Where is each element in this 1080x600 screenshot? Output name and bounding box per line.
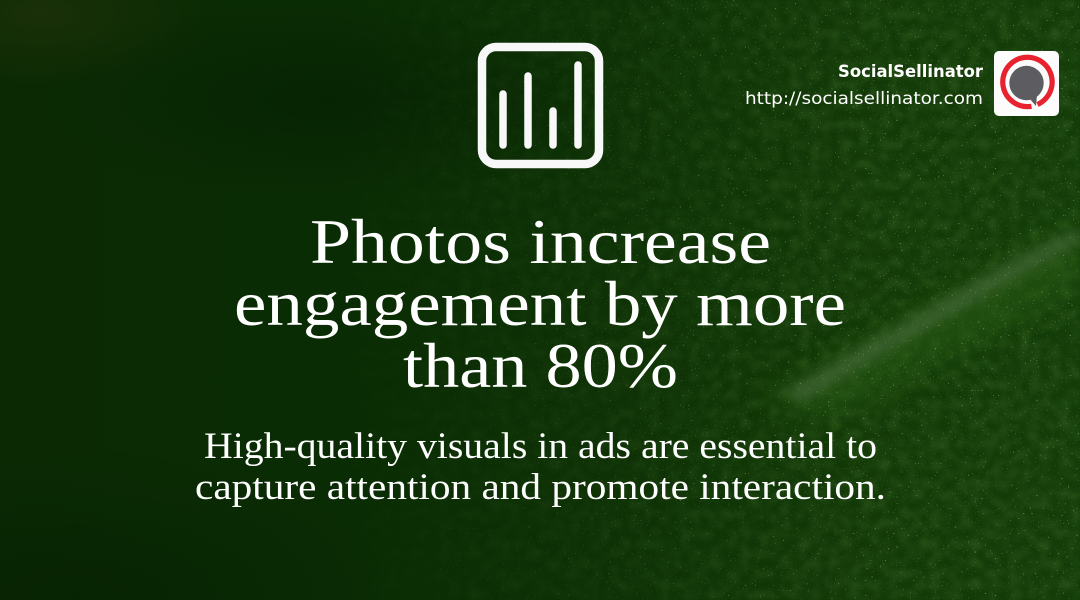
- brand url: http://socialsellinator.com: [745, 89, 983, 109]
- subtitle: capture attention and promote interaction.: [195, 467, 886, 508]
- icon: bar chart in rounded square: [482, 47, 599, 164]
- title: [234, 206, 846, 401]
- icon: SocialSellinator logo: [994, 51, 1059, 116]
- title: than 80%: [403, 330, 678, 401]
- brand name: SocialSellinator: [838, 62, 984, 81]
- subtitle: [195, 426, 886, 508]
- subtitle: High-quality visuals in ads are essential to: [204, 426, 877, 467]
- title: Photos increase: [310, 206, 771, 277]
- title: engagement by more: [234, 268, 846, 339]
